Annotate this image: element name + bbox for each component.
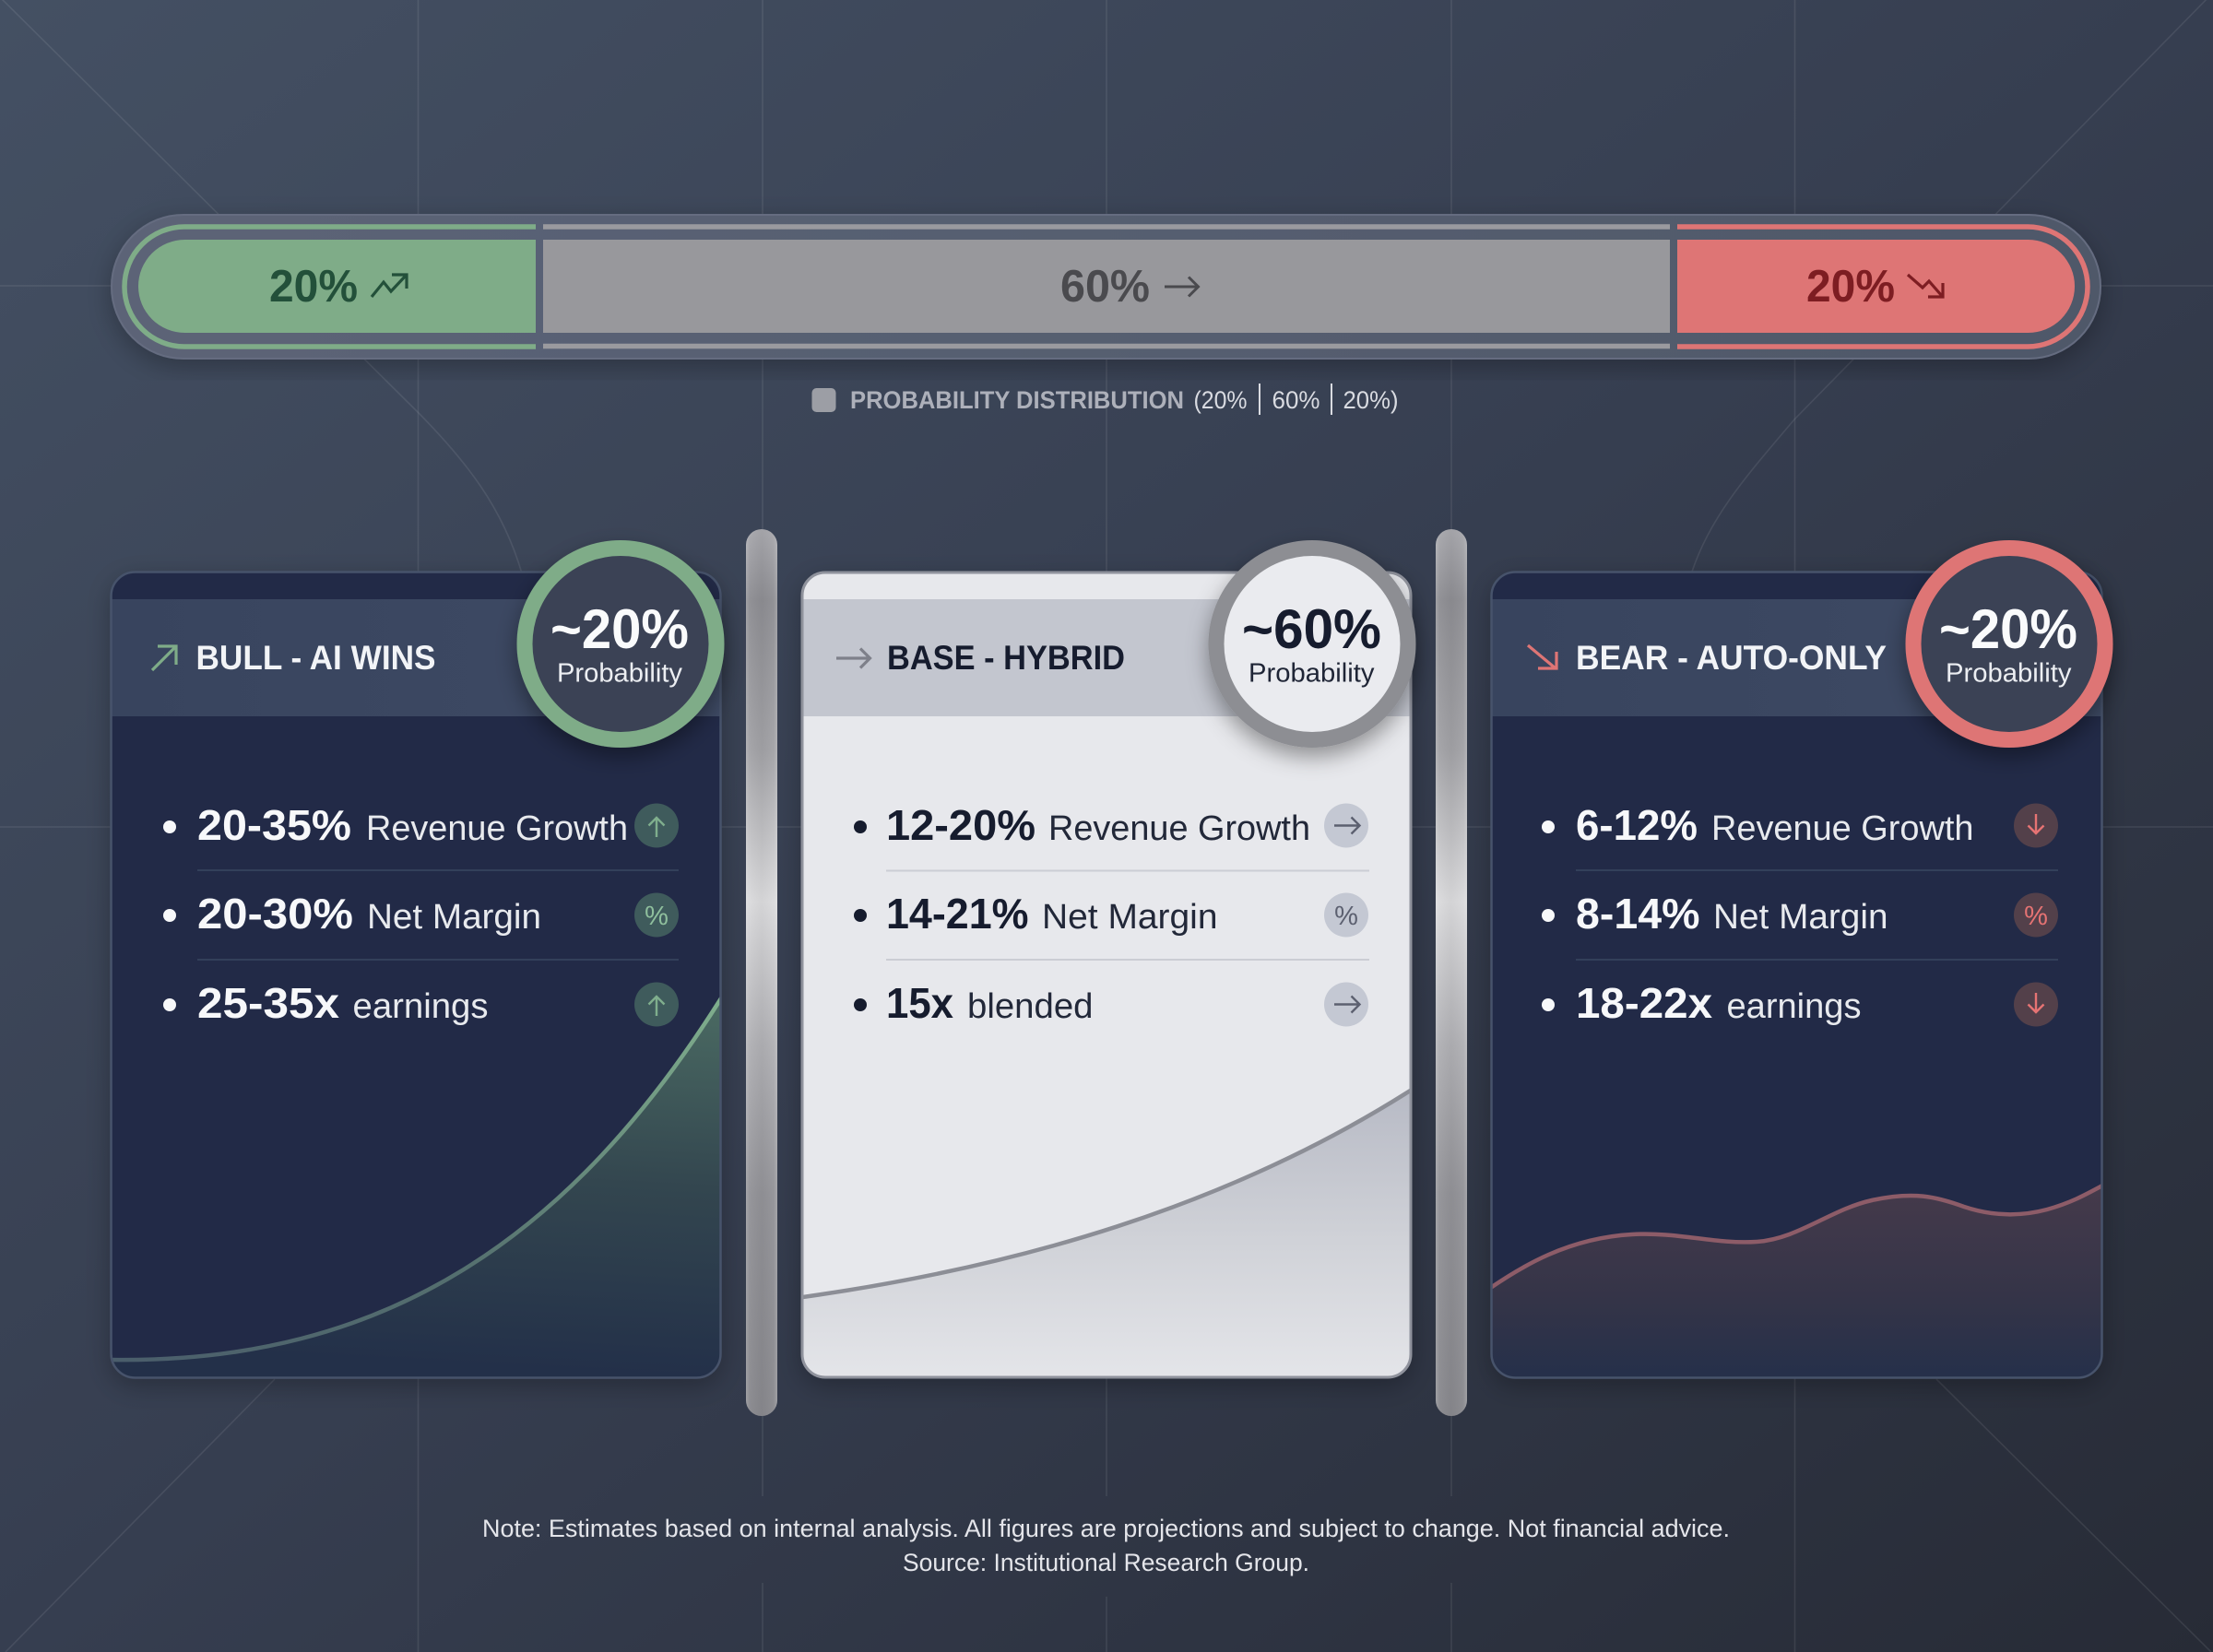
probability badge: bear — [1913, 548, 2105, 739]
segment: bear 20%: 20% — [1806, 262, 1895, 312]
chart: bear flat curve — [1492, 1184, 2101, 1351]
legend: probability distribution: 20%) — [1343, 386, 1398, 414]
metrics: base — [854, 801, 1369, 1027]
header band — [111, 599, 721, 716]
segment: base 60%: 60% — [1060, 262, 1150, 312]
metric: net margin — [1542, 890, 2058, 938]
heading: bear: BEAR - AUTO-ONLY — [1576, 639, 1887, 677]
legend: probability distribution: (20% — [1193, 386, 1247, 414]
metric: net margin: % — [2024, 902, 2048, 931]
icon: arrow down right — [1528, 645, 1556, 668]
bar track — [112, 215, 2101, 359]
metric: net margin: 8-14% — [1576, 890, 1700, 938]
metric: net margin: 14-21% — [886, 890, 1029, 938]
legend: probability distribution: 60% — [1272, 386, 1320, 414]
metric: blended multiple — [854, 979, 1368, 1027]
header band — [1491, 599, 2102, 716]
metric: net margin: Net Margin — [1713, 898, 1888, 937]
icon: arrow up right — [152, 646, 176, 670]
metric: net margin — [163, 890, 679, 938]
icon: arrow right — [836, 649, 870, 667]
metric: revenue growth — [163, 801, 679, 849]
probability badge: bull: ~20% — [550, 598, 689, 660]
metric: revenue growth: 12-20% — [886, 801, 1035, 849]
probability badge: base — [1216, 548, 1408, 739]
chart: bull growth curve — [110, 996, 723, 1378]
segment: bull 20% — [124, 227, 536, 347]
divider: right metal bar — [1436, 529, 1467, 1416]
probability badge: bear: ~20% — [1939, 598, 2077, 660]
panel: bear — [1489, 548, 2105, 1378]
metric: net margin: 20-30% — [197, 890, 353, 938]
icon: trending up — [372, 275, 407, 297]
panel: base — [799, 548, 1414, 1378]
divider: left metal bar — [746, 529, 777, 1416]
legend: probability distribution — [811, 384, 1398, 415]
metric: earnings multiple — [1542, 979, 2058, 1027]
metric: revenue growth: 6-12% — [1576, 801, 1698, 849]
metrics: bear — [1542, 801, 2058, 1027]
metric: revenue growth: 20-35% — [197, 801, 351, 849]
metric: revenue growth: Revenue Growth — [1711, 809, 1973, 848]
segment: base 60% — [543, 227, 1670, 347]
segment: bear 20% — [1677, 227, 2088, 347]
panel: bull — [110, 548, 723, 1378]
icon: flat arrow — [1165, 277, 1199, 297]
metric: earnings multiple: 25-35x — [197, 979, 339, 1027]
metric: blended multiple: 15x — [886, 979, 953, 1027]
probability badge: base: ~60% — [1242, 598, 1381, 660]
footnote: Note: Estimates based on internal analysis. All figures are projections and subject to change. Not financial advice. — [482, 1515, 1730, 1542]
legend: probability distribution: PROBABILITY DISTRIBUTION — [850, 386, 1184, 414]
metric: net margin — [854, 890, 1368, 938]
metric: net margin: % — [645, 902, 669, 931]
metric: earnings multiple: 18-22x — [1576, 979, 1712, 1027]
metric: earnings multiple — [163, 979, 679, 1027]
metric: revenue growth: Revenue Growth — [1048, 809, 1310, 848]
footnote — [482, 1515, 1730, 1576]
metrics: bull — [163, 801, 679, 1027]
header band — [801, 599, 1412, 716]
segment: bull 20%: 20% — [269, 262, 358, 312]
probability bar — [112, 215, 2101, 359]
probability badge: bear: Probability — [1946, 658, 2072, 688]
chart: base growth curve — [804, 1089, 1409, 1344]
metric: revenue growth — [1542, 801, 2058, 849]
metric: earnings multiple: earnings — [1726, 987, 1861, 1026]
metric: revenue growth: Revenue Growth — [366, 809, 628, 848]
metric: revenue growth — [854, 801, 1368, 849]
metric: net margin: Net Margin — [1042, 898, 1217, 937]
heading: bull: BULL - AI WINS — [195, 639, 435, 677]
metric: net margin: Net Margin — [367, 898, 541, 937]
metric: net margin: % — [1334, 902, 1358, 931]
probability badge: bull: Probability — [557, 658, 682, 688]
icon: trending down — [1908, 275, 1943, 297]
footnote: Source: Institutional Research Group. — [903, 1549, 1309, 1576]
heading: base: BASE - HYBRID — [887, 639, 1125, 677]
metric: blended multiple: blended — [967, 987, 1094, 1026]
metric: earnings multiple: earnings — [352, 987, 489, 1026]
probability badge: bull — [525, 548, 716, 739]
probability badge: base: Probability — [1249, 658, 1375, 688]
